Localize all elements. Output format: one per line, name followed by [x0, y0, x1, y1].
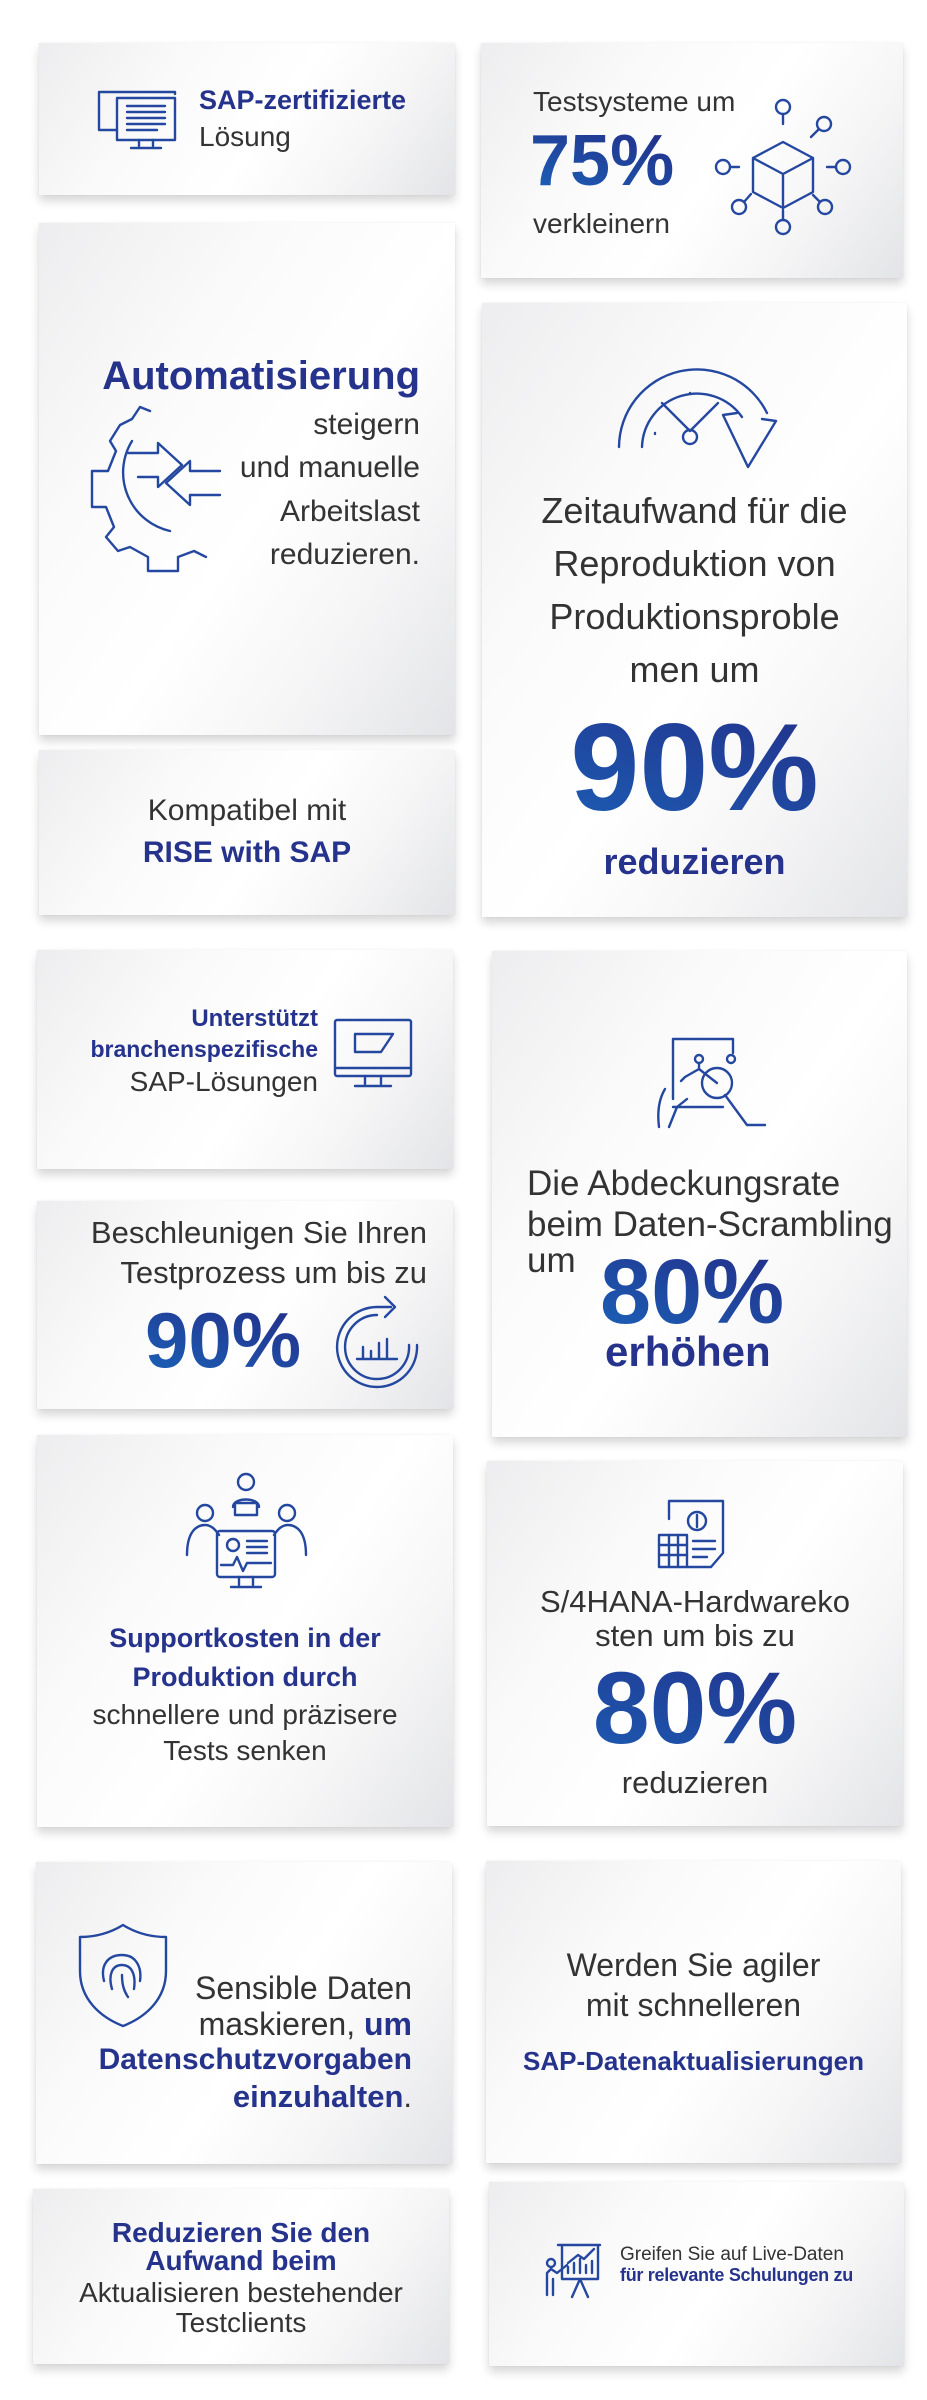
text: Beschleunigen Sie Ihren Testprozess um bis zu: Beschleunigen Sie Ihren — [91, 1215, 427, 1250]
text: SAP-zertifizierte Lösung — [199, 85, 406, 152]
text: steigern und manuelle Arbeitslast reduzieren: reduzieren. — [270, 538, 420, 571]
text: reduzieren: reduzieren — [603, 841, 786, 882]
number: 75%: 75% — [530, 121, 674, 201]
panel: Live-Daten Schulungen — [489, 2182, 904, 2366]
text: erhöhen: erhöhen — [605, 1328, 771, 1375]
text: SAP-zertifizierte Lösung: Lösung — [199, 121, 291, 152]
number: 80% — [487, 1657, 903, 1759]
text: Supportkosten in der Produktion durch: schnellere und präzisere — [92, 1699, 398, 1730]
number: 90% — [482, 706, 907, 830]
icon: team meeting — [186, 1472, 308, 1588]
panel: Daten-Scrambling 80% — [492, 951, 907, 1437]
icon: circular arrow chart — [336, 1296, 418, 1388]
icon: tablet with key — [657, 1038, 766, 1128]
text: RISE with SAP: RISE with SAP — [143, 836, 351, 869]
icon: clock with arrow — [618, 368, 778, 468]
text: steigern und manuelle Arbeitslast reduzieren: steigern — [313, 408, 420, 441]
icon: cube network — [714, 98, 852, 236]
text: Zeitaufwand für die Reproduktion von Produktionsprobleme um: Reproduktion von — [553, 543, 836, 584]
panel: SAP-zertifizierte Lösung — [39, 43, 455, 195]
icon: certified monitor — [98, 90, 176, 150]
text: Reduzieren Sie den Aufwand beim Aktualisieren bestehender Testclients: Aktualisieren bestehender — [79, 2277, 403, 2308]
panel: S/4HANA-Hardwarekosten 80% — [487, 1461, 903, 1826]
text: Zeitaufwand für die Reproduktion von Produktionsprobleme um: Zeitaufwand für die — [541, 490, 848, 531]
panel: Automatisierung — [39, 223, 455, 735]
text: Greifen Sie auf Live-Daten für relevante Schulungen zu: für relevante Schulungen zu — [620, 2265, 853, 2285]
icon: gear with arrows — [90, 406, 222, 572]
icon: invoice calculator — [658, 1500, 724, 1568]
text: Die Abdeckungsrate beim Daten-Scrambling um: beim Daten-Scrambling — [527, 1205, 893, 1244]
icon: presenter with chart — [546, 2244, 602, 2298]
text: Testsysteme um: Testsysteme um — [533, 86, 735, 117]
panel: agiler SAP-Datenaktualisierungen — [486, 1861, 901, 2163]
text: steigern und manuelle Arbeitslast reduzieren: Arbeitslast — [280, 495, 420, 528]
text: Die Abdeckungsrate beim Daten-Scrambling um — [527, 1164, 893, 1280]
number: 80%: 80% — [593, 1651, 797, 1765]
text: Sensible Daten maskieren, um Datenschutzvorgaben einzuhalten: Sensible Daten — [195, 1970, 412, 2006]
text: S/4HANA-Hardwarekosten um bis zu — [540, 1584, 850, 1653]
text: Unterstützt branchenspezifische SAP-Lösungen: Unterstützt — [191, 1005, 318, 1032]
text: Sensible Daten maskieren, um Datenschutzvorgaben einzuhalten — [99, 1970, 412, 2114]
text: Beschleunigen Sie Ihren Testprozess um bis zu: Testprozess um bis zu — [120, 1255, 427, 1290]
text: Supportkosten in der Produktion durch: Tests senken — [163, 1735, 327, 1766]
text: Zeitaufwand für die Reproduktion von Produktionsprobleme um: Produktionsproble — [549, 596, 840, 637]
panel: Zeitaufwand 90% — [482, 303, 907, 917]
text: Werden Sie agiler mit schnelleren — [566, 1947, 820, 2023]
icon: monitor — [334, 1018, 412, 1088]
text: Werden Sie agiler mit schnelleren: Werden Sie agiler — [567, 1947, 820, 1983]
text: Unterstützt branchenspezifische SAP-Lösungen: SAP-Lösungen — [130, 1066, 318, 1097]
panel: Testsysteme 75% — [481, 43, 903, 278]
text: Greifen Sie auf Live-Daten für relevante Schulungen zu: Greifen Sie auf Live-Daten — [620, 2244, 844, 2265]
text: S/4HANA-Hardwarekosten um bis zu: S/4HANA-Hardwareko — [540, 1584, 850, 1619]
text: Supportkosten in der Produktion durch — [92, 1623, 398, 1766]
panel: Sensible Daten maskieren — [36, 1862, 452, 2164]
text: Sensible Daten maskieren, um Datenschutzvorgaben einzuhalten: Datenschutzvorgaben — [99, 2043, 412, 2076]
text: Zeitaufwand für die Reproduktion von Produktionsprobleme um: men um — [629, 649, 760, 690]
text: Zeitaufwand für die Reproduktion von Produktionsprobleme um — [541, 490, 848, 690]
panel: Testclients aktualisieren — [33, 2189, 449, 2364]
text: Beschleunigen Sie Ihren Testprozess um bis zu — [91, 1215, 427, 1290]
text: Reduzieren Sie den Aufwand beim Aktualisieren bestehender Testclients: Aufwand beim — [145, 2245, 337, 2276]
number: 80%: 80% — [600, 1241, 784, 1343]
text: Unterstützt branchenspezifische SAP-Lösungen — [90, 1005, 318, 1097]
text: Unterstützt branchenspezifische SAP-Lösungen: branchenspezifische — [90, 1036, 318, 1062]
text: Sensible Daten maskieren, um Datenschutzvorgaben einzuhalten: maskieren, um — [199, 2006, 412, 2042]
text: Werden Sie agiler mit schnelleren: mit schnelleren — [586, 1987, 801, 2023]
number: 90%: 90% — [145, 1296, 301, 1384]
text: S/4HANA-Hardwarekosten um bis zu: sten um bis zu — [595, 1618, 795, 1653]
text: Reduzieren Sie den Aufwand beim Aktualisieren bestehender Testclients — [79, 2217, 403, 2338]
text: Die Abdeckungsrate beim Daten-Scrambling um: um — [527, 1241, 576, 1280]
text: SAP-zertifizierte Lösung: SAP-zertifizierte — [199, 85, 406, 115]
panel: RISE with SAP — [39, 750, 455, 915]
panel: Testprozess 90% — [37, 1201, 453, 1409]
text: reduzieren: reduzieren — [622, 1765, 768, 1800]
text: Reduzieren Sie den Aufwand beim Aktualisieren bestehender Testclients: Testclients — [176, 2307, 306, 2338]
number: 90%: 90% — [570, 699, 819, 837]
heading: Automatisierung: Automatisierung — [102, 354, 420, 398]
text: Reduzieren Sie den Aufwand beim Aktualisieren bestehender Testclients: Reduzieren Sie den — [112, 2217, 370, 2248]
text: Supportkosten in der Produktion durch: Supportkosten in der — [109, 1623, 381, 1653]
panel: Supportkosten — [37, 1435, 453, 1827]
text: Kompatibel mit: Kompatibel mit — [148, 794, 346, 827]
text: steigern und manuelle Arbeitslast reduzieren — [240, 408, 420, 571]
text: Greifen Sie auf Live-Daten für relevante Schulungen zu — [620, 2244, 853, 2285]
text: SAP-Datenaktualisierungen: SAP-Datenaktualisierungen — [523, 2046, 864, 2076]
icon: shield fingerprint — [78, 1924, 168, 2028]
text: Sensible Daten maskieren, um Datenschutzvorgaben einzuhalten: einzuhalten. — [233, 2079, 412, 2114]
text: Die Abdeckungsrate beim Daten-Scrambling um: Die Abdeckungsrate — [527, 1164, 840, 1203]
text: Supportkosten in der Produktion durch: Produktion durch — [132, 1662, 358, 1692]
panel: branchenspezifische SAP-Lösungen — [37, 950, 453, 1169]
text: steigern und manuelle Arbeitslast reduzieren: und manuelle — [240, 451, 420, 484]
text: verkleinern: verkleinern — [533, 208, 670, 239]
